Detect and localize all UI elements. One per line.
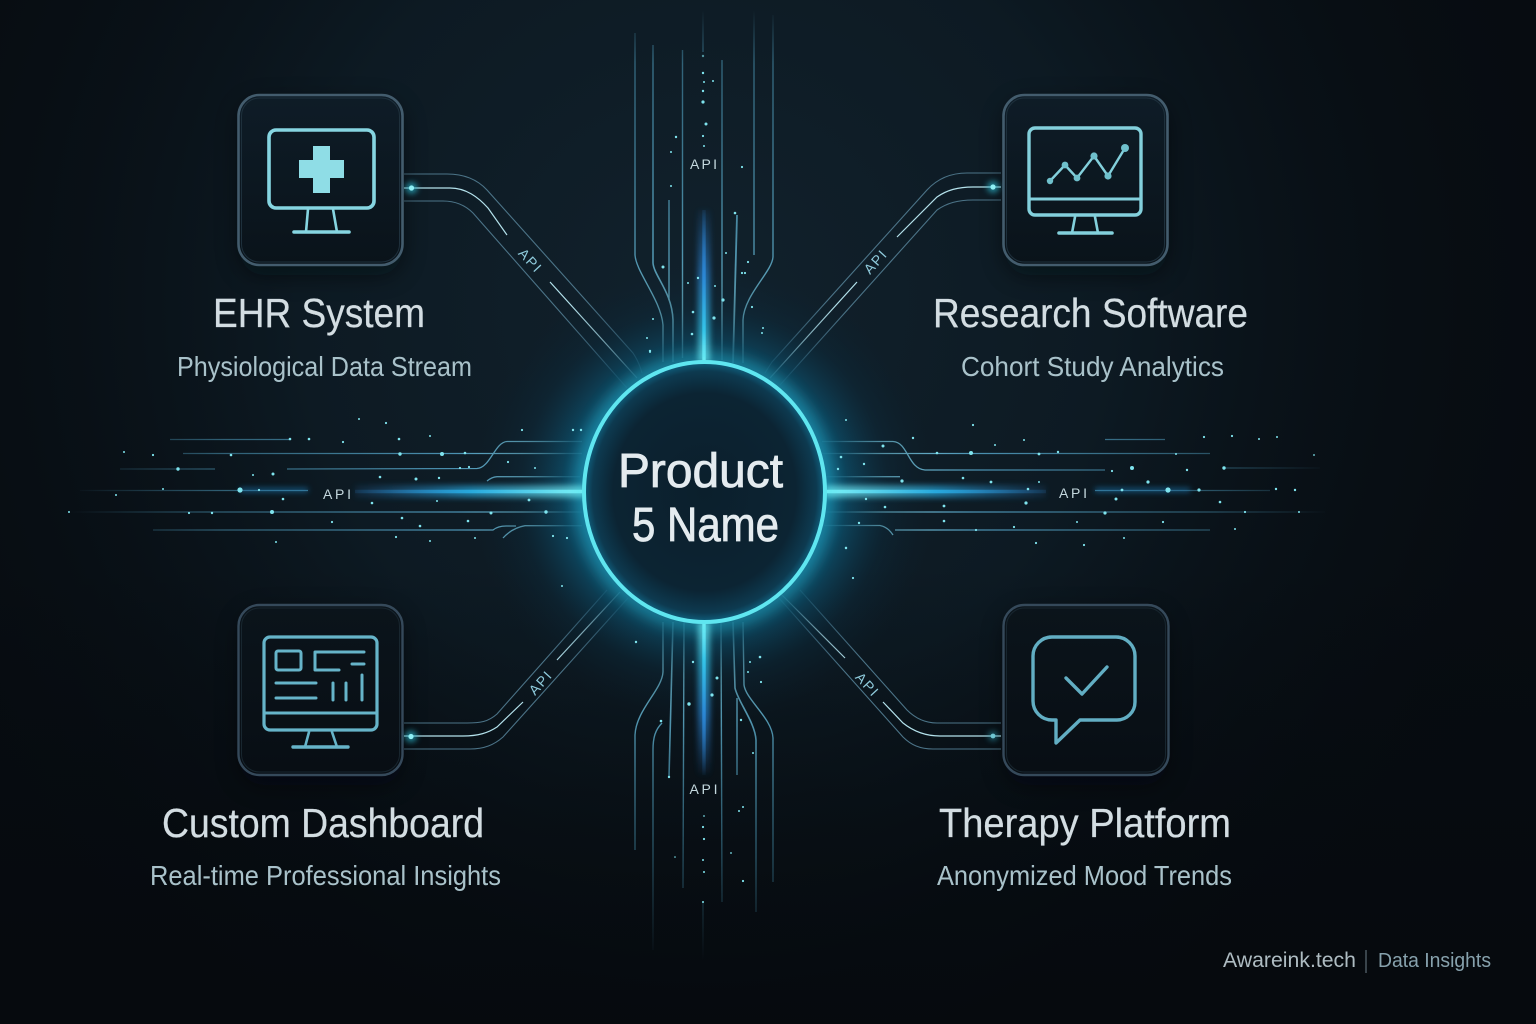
icon: dashboard monitor bbox=[264, 637, 377, 747]
title: EHR System: EHR System bbox=[213, 290, 425, 336]
hub: Product 5 Name bbox=[582, 360, 826, 624]
panel: EHR System bbox=[177, 95, 472, 382]
icon: monitor with line chart bbox=[1029, 128, 1141, 233]
subtitle: Anonymized Mood Trends: Anonymized Mood Trends bbox=[937, 860, 1232, 891]
subtitle: Physiological Data Stream: Physiological Data Stream bbox=[177, 351, 472, 382]
API label: upper right connector: API bbox=[860, 247, 890, 277]
API label: lower left connector: API bbox=[525, 668, 555, 698]
panel: Therapy Platform bbox=[937, 605, 1232, 891]
API label: upper left connector: API bbox=[515, 245, 545, 275]
title: Custom Dashboard: Custom Dashboard bbox=[162, 800, 484, 846]
connector node dots bbox=[405, 181, 999, 742]
connector: Research Software to hub bbox=[765, 173, 1001, 385]
connector: EHR System to hub bbox=[404, 174, 642, 388]
vertical data lines below the hub bbox=[635, 622, 773, 985]
icon: speech bubble with check mark bbox=[1033, 637, 1135, 743]
hub label: 5 Name bbox=[632, 499, 779, 552]
connector: Custom Dashboard to hub bbox=[404, 590, 628, 749]
subtitle: Cohort Study Analytics: Cohort Study Analytics bbox=[961, 351, 1224, 382]
particle field bbox=[68, 55, 1315, 903]
light beams from the hub bbox=[240, 210, 1190, 775]
footer brand: Data Insights bbox=[1378, 950, 1491, 972]
hub label: Product bbox=[618, 445, 783, 498]
API label: left: API bbox=[323, 486, 351, 502]
API label: bottom: API bbox=[690, 781, 718, 797]
title: Therapy Platform: Therapy Platform bbox=[939, 800, 1231, 846]
icon: monitor with medical cross bbox=[269, 130, 374, 232]
footer brand bbox=[1223, 949, 1491, 973]
API label: top: API bbox=[690, 156, 717, 172]
connector: Therapy Platform to hub bbox=[778, 590, 1001, 749]
panel: Custom Dashboard bbox=[150, 605, 501, 891]
panel: Research Software bbox=[933, 95, 1248, 382]
horizontal data lines right of the hub bbox=[822, 440, 1325, 535]
title: Research Software: Research Software bbox=[933, 290, 1248, 336]
subtitle: Real-time Professional Insights: Real-time Professional Insights bbox=[150, 860, 501, 891]
footer brand: Awareink.tech bbox=[1223, 949, 1356, 972]
vertical data lines above the hub bbox=[635, 0, 773, 363]
horizontal data lines left of the hub bbox=[60, 440, 582, 538]
hub label bbox=[618, 445, 783, 552]
API label: right: API bbox=[1059, 485, 1087, 501]
API label: lower right connector: API bbox=[852, 669, 882, 699]
hub outer glow bbox=[474, 247, 934, 737]
